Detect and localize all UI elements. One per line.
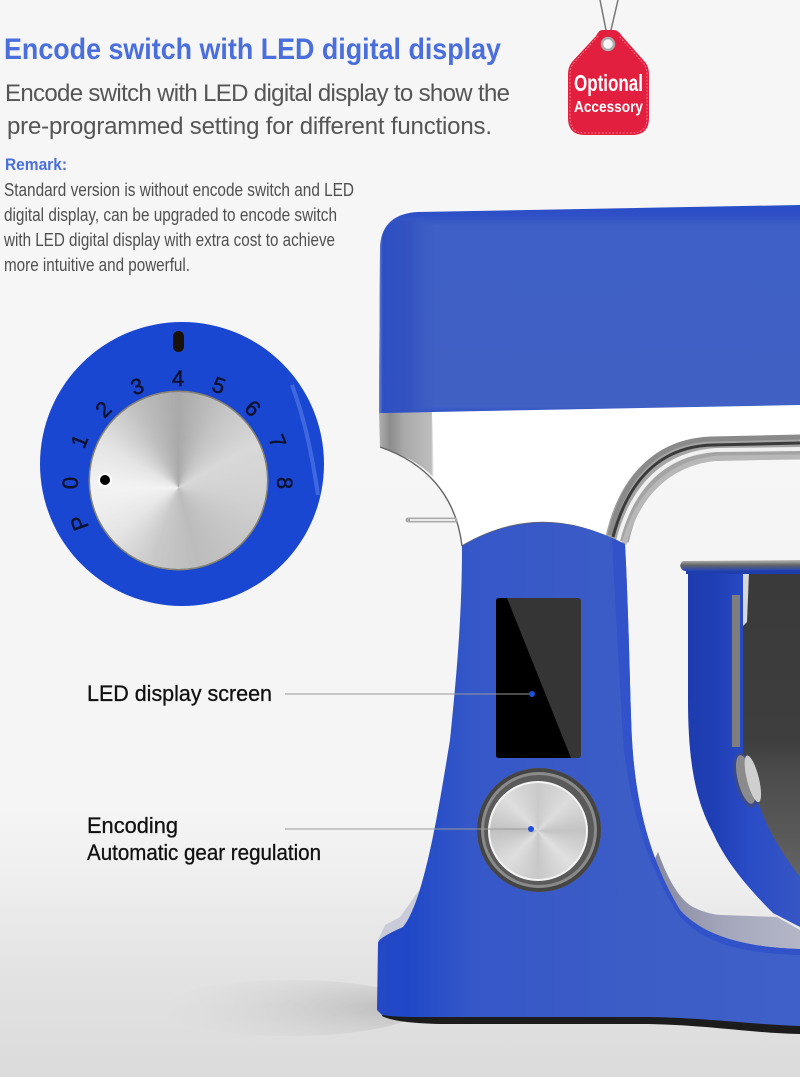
leader line: encoding bbox=[285, 826, 534, 832]
dial numbers: 2 bbox=[90, 396, 117, 423]
dial numbers: 8 bbox=[272, 477, 297, 489]
chrome handle bbox=[610, 437, 800, 544]
dial numbers: 6 bbox=[240, 395, 266, 422]
dial numbers: 1 bbox=[66, 431, 93, 452]
remark text: more intuitive and powerful. bbox=[4, 255, 190, 275]
left chrome neck bbox=[379, 404, 800, 546]
dial numbers: 7 bbox=[264, 431, 291, 452]
dial numbers: 3 bbox=[127, 373, 147, 400]
dial knob marker bbox=[100, 475, 110, 485]
dial slot bbox=[173, 331, 184, 352]
black base foot bbox=[382, 1008, 800, 1034]
base shelf bbox=[378, 852, 800, 952]
remark text bbox=[3, 180, 354, 275]
dial numbers: 5 bbox=[209, 372, 229, 399]
description: pre-programmed setting for different functions. bbox=[7, 113, 492, 140]
LED display screen bbox=[496, 598, 581, 758]
floor shadow bbox=[160, 980, 420, 1036]
label: LED display screen: LED display screen bbox=[87, 681, 272, 706]
dial numbers bbox=[58, 366, 297, 534]
remark text: with LED digital display with extra cost to achieve bbox=[3, 230, 335, 250]
stand body bbox=[377, 522, 800, 1026]
optional accessory tag bbox=[568, 0, 649, 135]
remark text: digital display, can be upgraded to encode switch bbox=[4, 205, 337, 225]
optional accessory tag: Optional bbox=[574, 70, 643, 96]
dial numbers: 4 bbox=[172, 366, 184, 391]
label: encoding: Automatic gear regulation bbox=[87, 840, 321, 865]
description bbox=[5, 80, 510, 140]
leader line: LED display bbox=[285, 691, 535, 697]
label: encoding: Encoding bbox=[87, 813, 178, 838]
mixer illustration bbox=[377, 205, 800, 1034]
encoding knob face bbox=[488, 781, 588, 881]
mixer head bbox=[379, 205, 800, 413]
title: Encode switch with LED digital display bbox=[4, 33, 501, 66]
bowl bbox=[680, 560, 800, 927]
encoding knob ring bbox=[477, 768, 601, 892]
description: Encode switch with LED digital display to show the bbox=[5, 80, 510, 107]
label: encoding bbox=[87, 813, 321, 865]
remark text: Standard version is without encode switch and LED bbox=[4, 180, 354, 200]
stand right saturated band bbox=[612, 538, 800, 955]
dial numbers: 0 bbox=[58, 477, 83, 489]
dial close-up bbox=[40, 322, 324, 606]
dial knob bbox=[90, 392, 267, 569]
optional accessory tag: Accessory bbox=[574, 99, 643, 116]
dial disc bbox=[40, 322, 324, 606]
dial numbers: P bbox=[65, 512, 94, 534]
remark heading: Remark: bbox=[5, 155, 67, 174]
